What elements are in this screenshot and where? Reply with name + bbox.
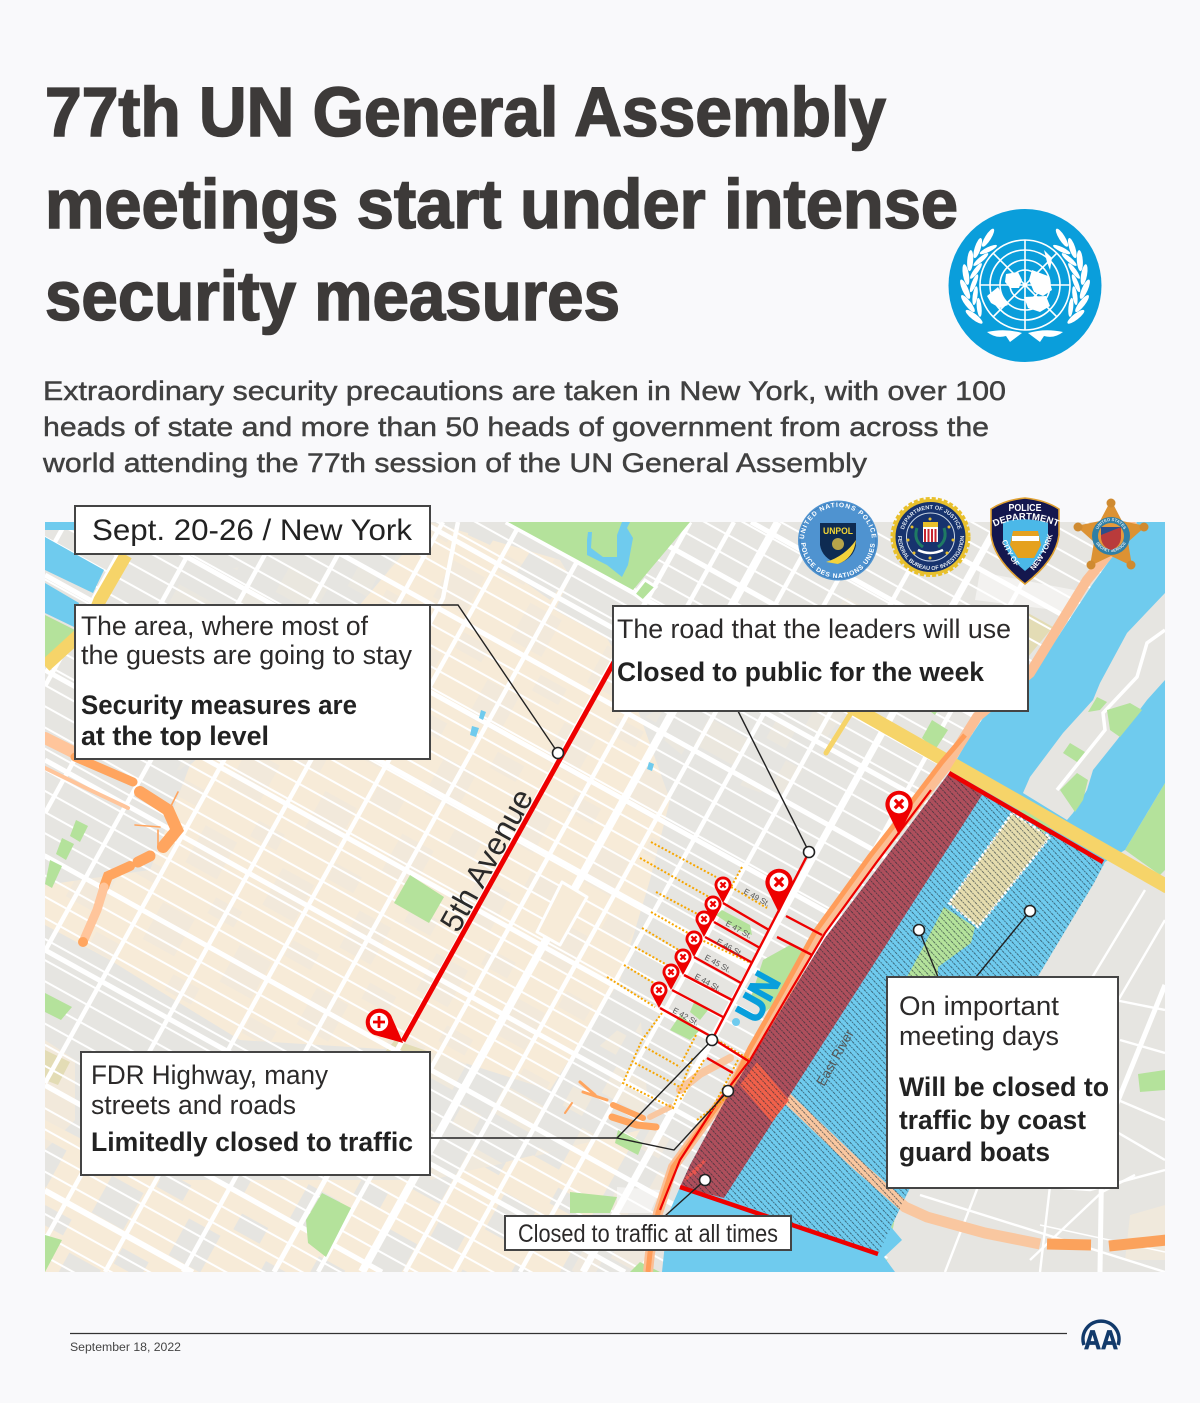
East River label: East River xyxy=(814,1027,857,1088)
Queens land xyxy=(885,862,1165,1272)
badge: NYPD xyxy=(990,497,1060,585)
UN label: UN xyxy=(728,965,788,1029)
ponds xyxy=(470,522,654,771)
UN label xyxy=(732,970,781,1026)
subtitle: Extraordinary security precautions are taken in New York, with over 100 xyxy=(43,376,1006,406)
icon: United Nations emblem xyxy=(948,209,1102,362)
badge: NYPD: CITY OF xyxy=(1002,540,1020,566)
subtitle: world attending the 77th session of the UN General Assembly xyxy=(42,448,868,478)
callout: leaders road xyxy=(613,606,1028,711)
callout: FDR highway: FDR Highway, many xyxy=(91,1060,328,1090)
Queensboro bridge xyxy=(850,706,1168,887)
minor cross streets xyxy=(45,522,1165,1272)
pin: plus marker on 5th Avenue xyxy=(366,1008,404,1043)
callout: meeting days: traffic by coast xyxy=(899,1105,1086,1135)
strip of park north of the island xyxy=(1018,810,1050,833)
left yellow highway and water xyxy=(45,522,126,666)
major streets xyxy=(45,522,1165,1272)
icon: Anadolu Agency logo: AA xyxy=(1084,1325,1118,1355)
subtitle xyxy=(42,376,1006,478)
callout: meeting days: Will be closed to xyxy=(899,1072,1109,1102)
5th Avenue red road xyxy=(403,662,614,1041)
badge: UN Police: UNITED NATIONS POLICE xyxy=(799,502,876,539)
Park Avenue viaduct loop xyxy=(537,882,587,945)
callout: dates and place xyxy=(75,506,430,554)
title: 77th UN General Assembly xyxy=(45,73,886,151)
callout: dates and place: Sept. 20-26 / New York xyxy=(92,514,413,547)
callout: leaders road: Closed to public for the week xyxy=(617,657,985,687)
street labels: E 49 St. xyxy=(742,887,771,909)
midtown tunnel ramps xyxy=(565,1058,730,1127)
title xyxy=(45,73,958,335)
badge: FBI: DEPARTMENT OF JUSTICE xyxy=(900,505,962,530)
leader endpoints xyxy=(552,748,1036,1186)
badge: Secret Service star: SECRET SERVICE xyxy=(1096,542,1126,552)
Roosevelt Island north xyxy=(1023,593,1165,820)
callout: meeting days: meeting days xyxy=(899,1021,1059,1051)
leader lines xyxy=(430,605,1030,1216)
pin: FDR closure xyxy=(885,791,913,835)
bridge ramp xyxy=(826,713,851,753)
callout: meeting days xyxy=(887,977,1118,1188)
badge: UN Police: UNPOL xyxy=(823,526,853,537)
badge: UN Police: POLICE DES NATIONS UNIES xyxy=(801,542,875,578)
callout: FDR highway: streets and roads xyxy=(91,1090,296,1120)
subtitle: heads of state and more than 50 heads of government from across the xyxy=(43,412,989,442)
pin: 1st Avenue closure xyxy=(765,869,793,913)
map of Midtown Manhattan xyxy=(45,522,1168,1272)
title: meetings start under intense xyxy=(45,165,958,243)
callout: meeting days: guard boats xyxy=(899,1137,1050,1167)
Queens-Midtown tunnel xyxy=(786,1094,1041,1250)
footer date: September 18, 2022 xyxy=(70,1342,181,1354)
callout: guests area xyxy=(75,605,430,759)
callout: meeting days: On important xyxy=(899,991,1060,1021)
callout: guests area: The area, where most of xyxy=(81,611,368,641)
street labels xyxy=(671,887,771,1028)
footer rule xyxy=(70,1332,1067,1334)
street labels: E 47 St. xyxy=(724,919,753,941)
street labels: E 44 St. xyxy=(693,972,722,994)
badge: Secret Service star xyxy=(1074,498,1148,570)
beige hotel district blocks xyxy=(45,522,1085,1272)
badge: FBI: FEDERAL BUREAU OF INVESTIGATION xyxy=(898,536,964,570)
5th Avenue label: 5th Avenue xyxy=(433,783,540,937)
street labels: E 42 St. xyxy=(671,1006,700,1028)
north and south closure lines xyxy=(680,773,1103,1254)
FDR Drive xyxy=(648,522,1135,1272)
badge: NYPD: POLICE xyxy=(1008,503,1042,514)
restricted zone hatch over water xyxy=(724,795,1105,1254)
street labels: E 46 St. xyxy=(715,937,744,959)
callout: guests area: Security measures are xyxy=(81,690,357,720)
dotted side streets xyxy=(607,842,767,1120)
badge: FBI xyxy=(890,497,970,577)
badge: Secret Service star: UNITED STATES xyxy=(1096,518,1126,530)
callout: closed at all times: Closed to traffic at all times xyxy=(518,1220,778,1248)
Roosevelt Island beige section xyxy=(949,813,1050,927)
Roosevelt Island green section xyxy=(907,907,975,977)
street closure pins xyxy=(650,876,732,1008)
badge: NYPD: DEPARTMENT xyxy=(992,512,1060,526)
badge: NYPD: NEW YORK xyxy=(1030,534,1053,570)
red closed streets xyxy=(660,852,822,1073)
callout: guests area: the guests are going to stay xyxy=(81,640,412,670)
callout: FDR highway xyxy=(81,1052,430,1175)
badge: UN Police xyxy=(798,500,878,580)
Lincoln tunnel ramps xyxy=(45,738,178,947)
East River water xyxy=(662,522,1165,1272)
callout: leaders road: The road that the leaders will use xyxy=(617,614,1011,644)
avenues xyxy=(45,522,1056,1272)
callout: FDR highway: Limitedly closed to traffic xyxy=(91,1127,413,1157)
parks xyxy=(45,522,1165,1272)
callout: guests area: at the top level xyxy=(81,721,269,751)
title: security measures xyxy=(45,257,620,335)
tunnel approach xyxy=(1047,1240,1167,1246)
FDR red closure line xyxy=(660,790,931,1210)
street labels: E 45 St. xyxy=(703,953,732,975)
red closed zone xyxy=(680,773,982,1198)
